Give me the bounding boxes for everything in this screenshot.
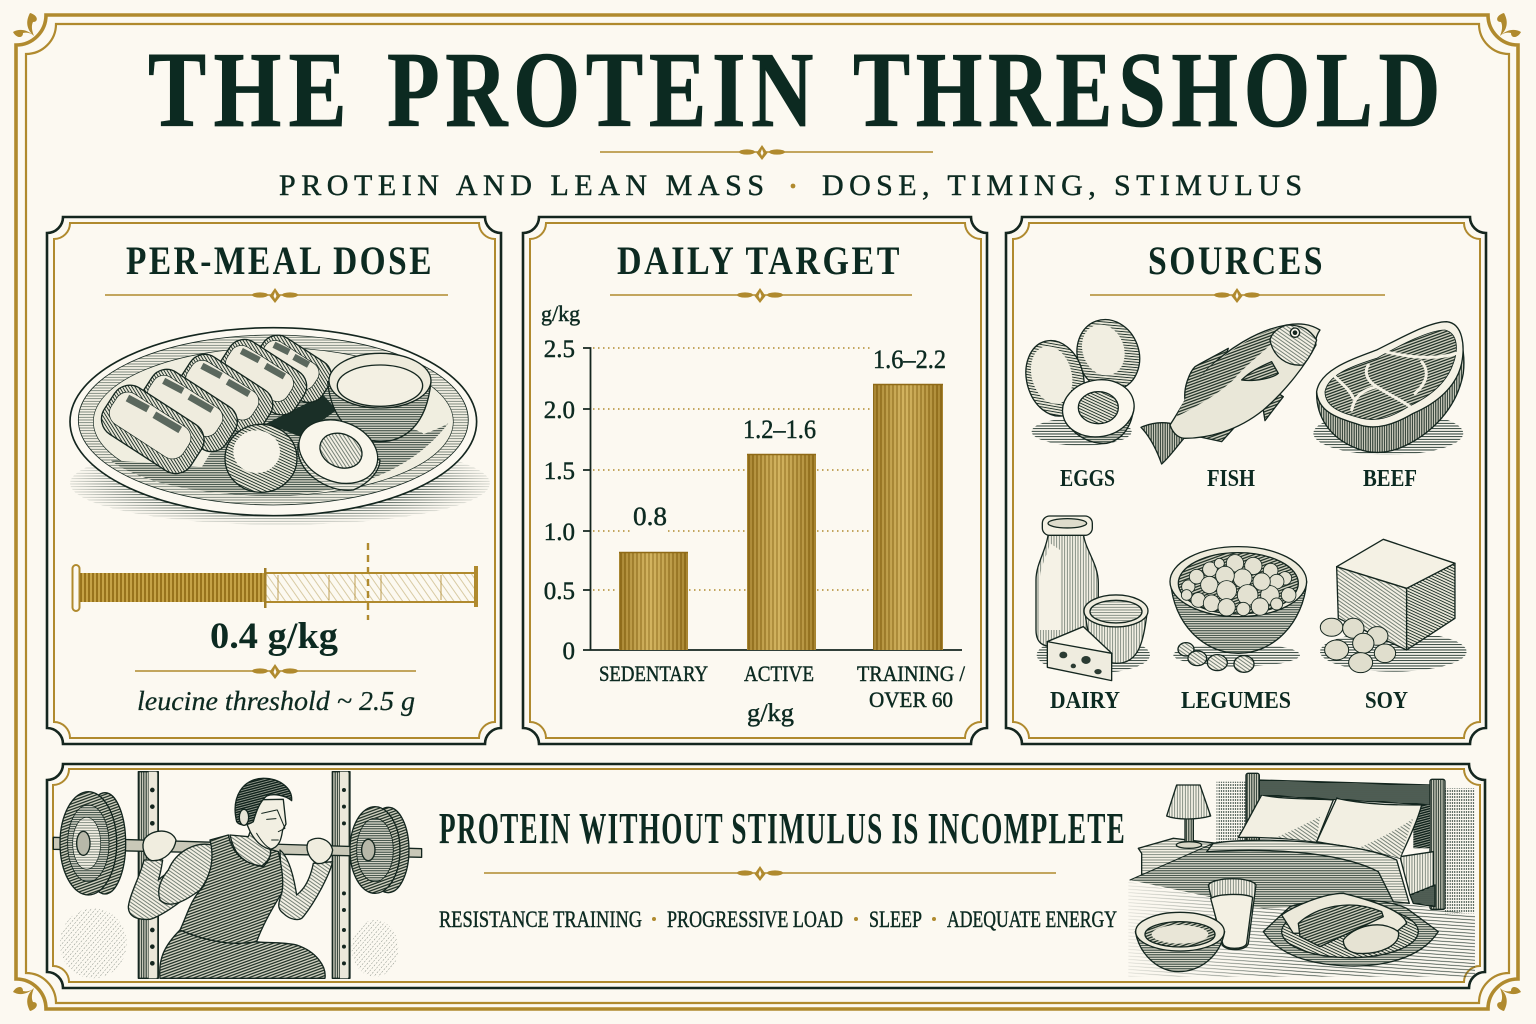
source labels: BEEF <box>1363 466 1417 492</box>
leucine note: leucine threshold ~ 2.5 g <box>137 686 415 716</box>
bar value labels: 1.2–1.6 <box>743 415 816 444</box>
icon: bed with recovery meal <box>1128 773 1475 977</box>
subtitle <box>279 169 1302 202</box>
bar value labels: 0.8 <box>633 502 667 531</box>
icon: eggs <box>1018 311 1149 446</box>
title: THE <box>148 31 354 150</box>
title <box>148 31 1446 150</box>
banner caption: ADEQUATE ENERGY <box>947 907 1117 932</box>
icon: dairy <box>1036 516 1150 681</box>
panel: daily target <box>523 217 987 744</box>
banner caption <box>439 907 1117 932</box>
banner divider <box>484 866 1056 881</box>
panel: sources <box>1006 217 1486 744</box>
subtitle: DOSE, TIMING, STIMULUS <box>822 169 1302 202</box>
title: PROTEIN <box>387 31 819 150</box>
panel: stimulus banner <box>47 764 1485 988</box>
heading divider <box>1090 288 1385 303</box>
progress bar: per-meal dose <box>72 543 478 620</box>
category labels: OVER 60 <box>869 687 953 712</box>
axis unit bottom: g/kg <box>747 700 795 727</box>
category labels: ACTIVE <box>744 661 814 686</box>
icon: legumes <box>1170 547 1307 672</box>
axes <box>583 348 962 650</box>
y axis tick labels: 0 <box>562 638 575 665</box>
icon: fish <box>1141 324 1320 464</box>
category labels: TRAINING / <box>857 661 966 686</box>
panel: per-meal dose <box>47 217 501 744</box>
source labels <box>1050 466 1417 714</box>
source labels: DAIRY <box>1050 688 1120 714</box>
banner caption: PROGRESSIVE LOAD <box>667 907 843 932</box>
subtitle: PROTEIN AND LEAN MASS <box>279 169 764 202</box>
icon: beef <box>1313 322 1464 455</box>
bar value labels <box>633 345 946 531</box>
y axis tick labels: 0.5 <box>544 578 575 605</box>
heading: sources: SOURCES <box>1148 238 1325 283</box>
source labels: EGGS <box>1060 466 1115 492</box>
dose value: 0.4 g/kg <box>210 616 339 657</box>
heading: per-meal dose: PER-MEAL DOSE <box>126 238 434 283</box>
bar chart <box>541 301 966 727</box>
icon: weightlifter squatting <box>53 772 422 978</box>
icon: plate with sliced chicken, eggs and sauce <box>70 328 490 525</box>
category labels <box>599 661 966 712</box>
heading divider <box>105 288 448 303</box>
y axis tick labels <box>544 336 575 665</box>
axis unit top: g/kg <box>541 301 580 326</box>
bar: sedentary <box>619 552 688 650</box>
source labels: SOY <box>1365 688 1408 714</box>
y axis tick labels: 2.5 <box>544 336 575 363</box>
icon: soy <box>1320 539 1467 673</box>
banner caption: SLEEP <box>869 907 922 932</box>
source labels: LEGUMES <box>1181 688 1291 714</box>
y axis tick labels: 1.5 <box>544 458 575 485</box>
title divider <box>600 145 933 160</box>
value divider <box>135 664 416 679</box>
heading: daily target: DAILY TARGET <box>617 238 902 283</box>
bar value labels: 1.6–2.2 <box>873 345 946 374</box>
bar: training <box>873 384 943 650</box>
y axis tick labels: 1.0 <box>544 519 575 546</box>
y axis tick labels: 2.0 <box>544 397 575 424</box>
bar: active <box>747 454 816 650</box>
source labels: FISH <box>1207 466 1255 492</box>
banner caption: RESISTANCE TRAINING <box>439 907 642 932</box>
heading divider <box>610 288 912 303</box>
banner headline: PROTEIN WITHOUT STIMULUS IS INCOMPLETE <box>439 804 1126 853</box>
category labels: SEDENTARY <box>599 661 708 686</box>
